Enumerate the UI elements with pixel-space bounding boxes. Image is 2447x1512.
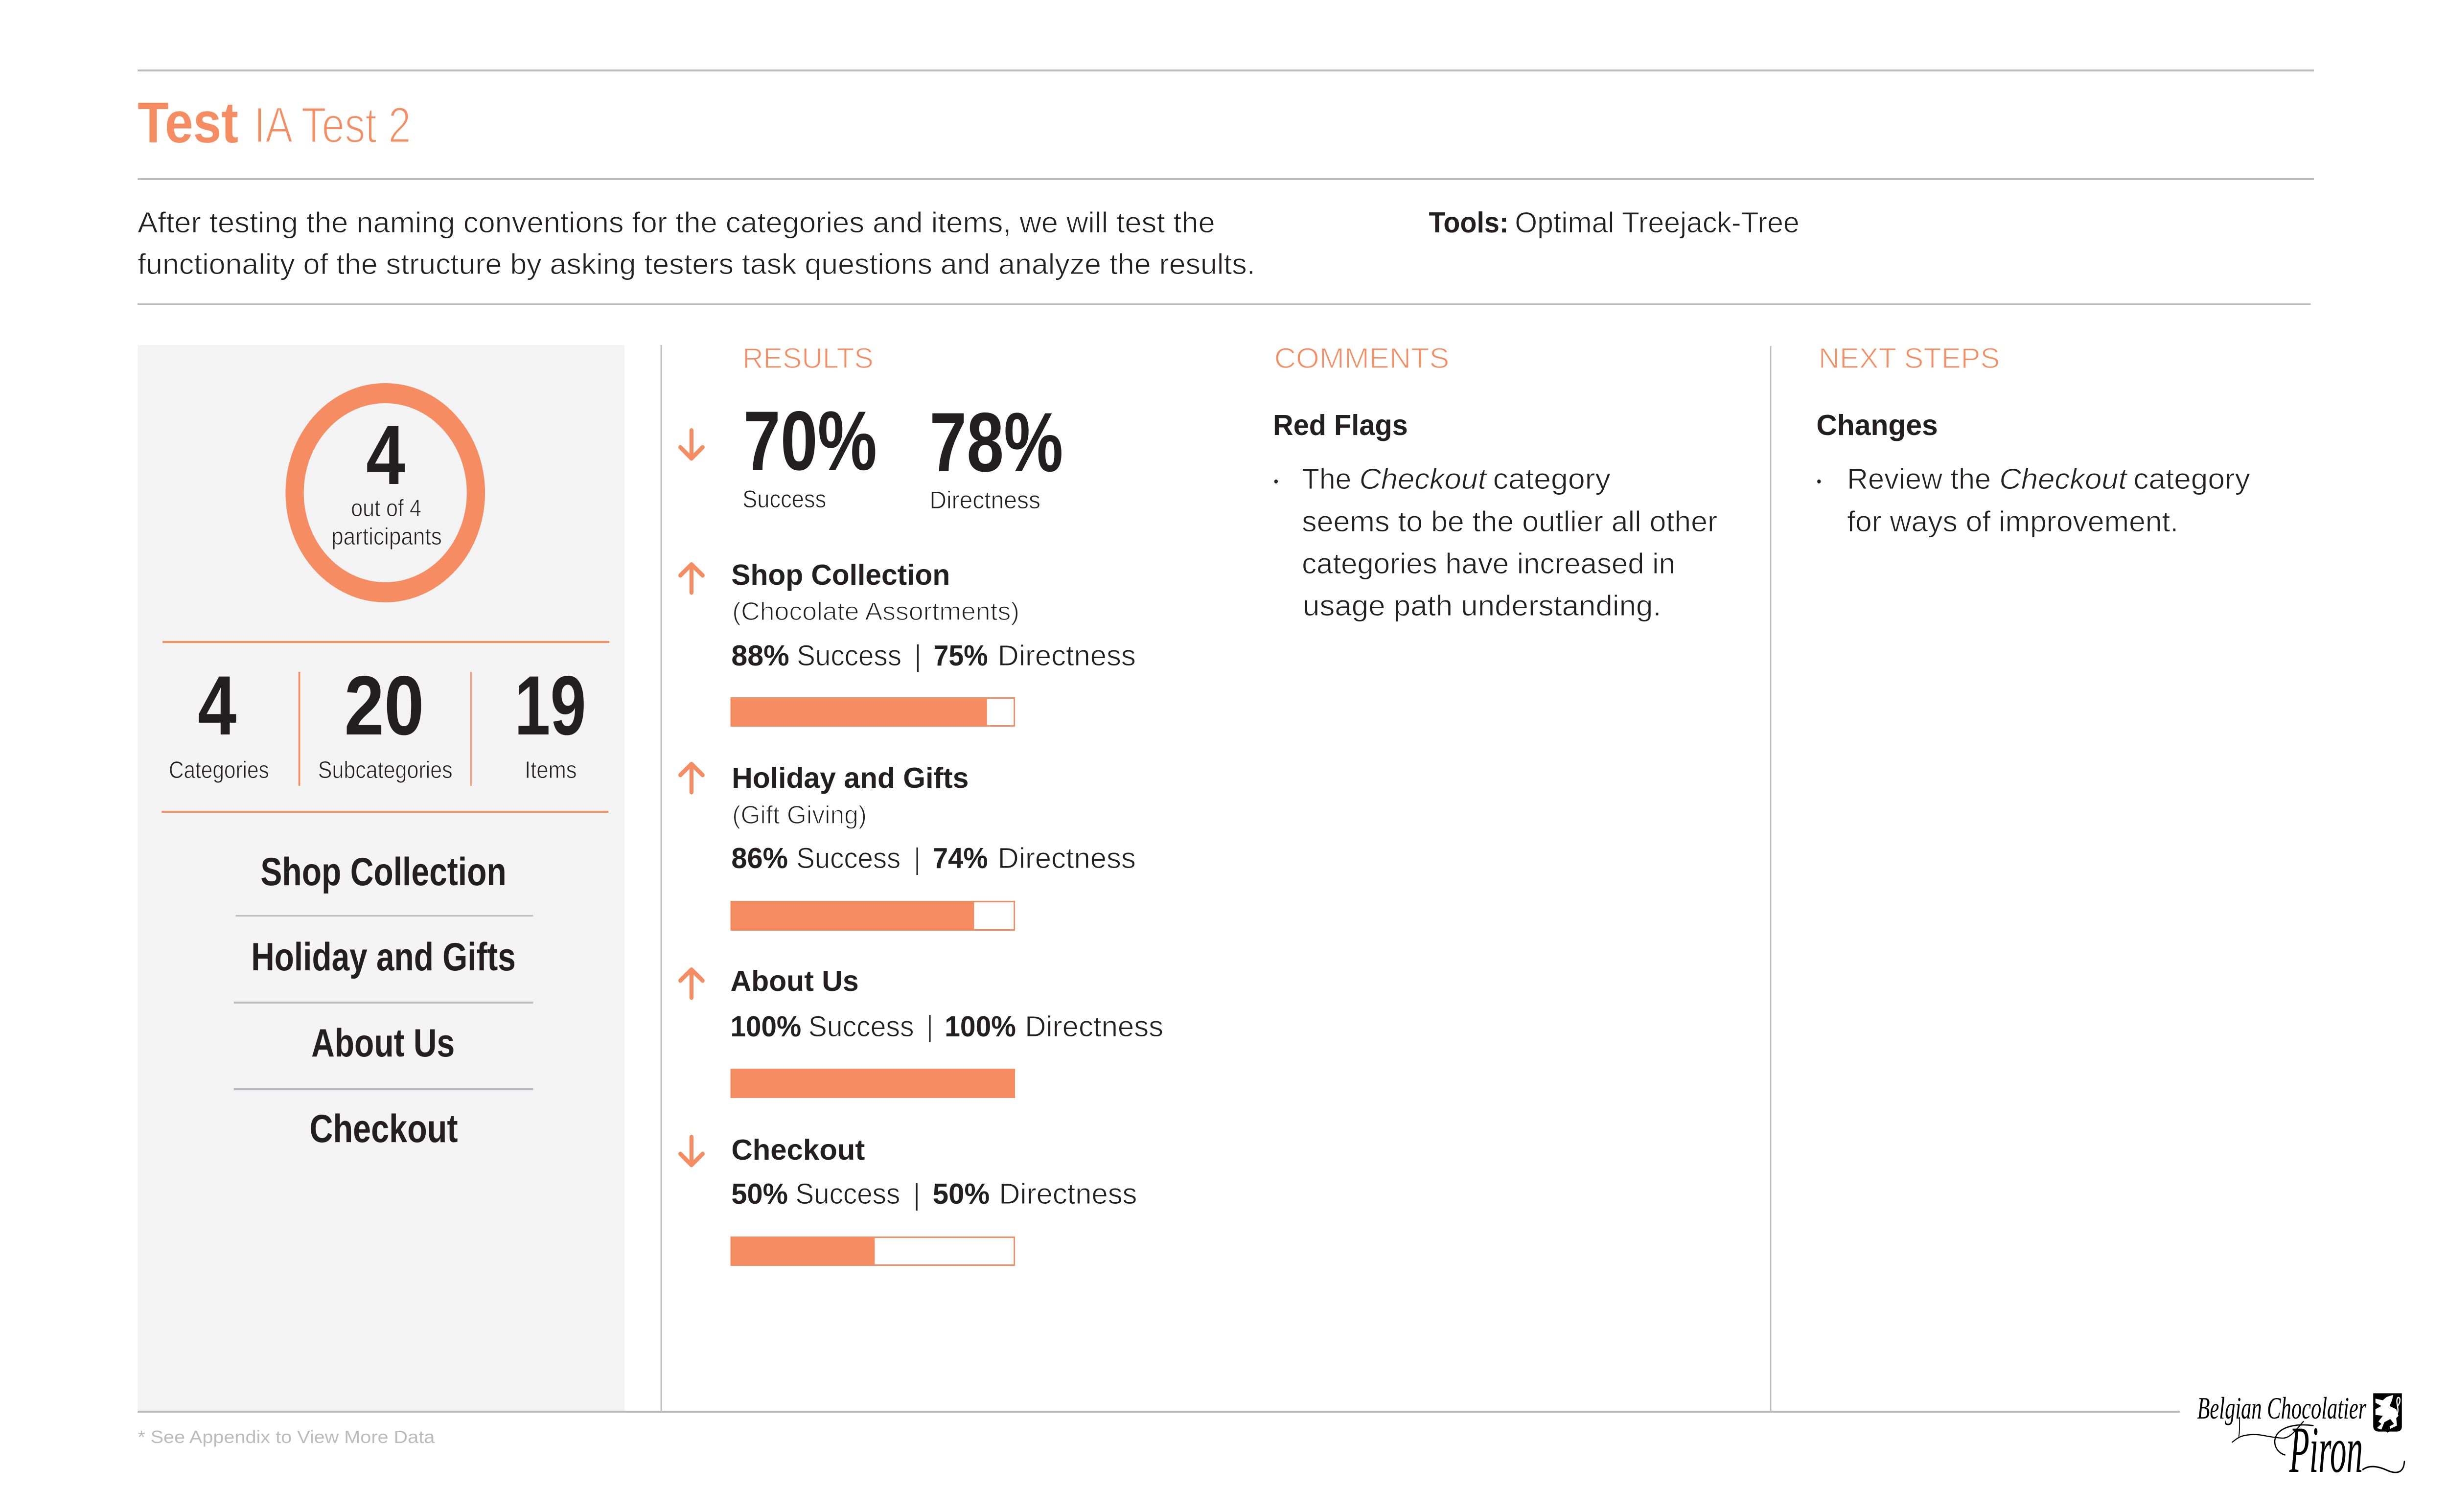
- bullet text: red flags: seems to be the outlier all other: [1302, 505, 1717, 538]
- bullet text: changes: for ways of improvement.: [1847, 505, 2178, 538]
- result: about us: Directness: [1025, 1010, 1163, 1043]
- stat: categories: [169, 658, 269, 783]
- bullet text: red flags: The: [1302, 463, 1351, 495]
- heading: next steps: NEXT STEPS: [1819, 343, 2000, 374]
- result: shop collection: Success: [797, 640, 901, 672]
- result: shop collection: Directness: [998, 640, 1136, 672]
- intro text: functionality of the structure by asking testers task questions and analyze the results.: [138, 248, 1255, 280]
- bullet text: red flags: usage path understanding.: [1303, 590, 1662, 622]
- intro text: [138, 206, 1255, 280]
- logo: Belgian Chocolatier Piron: Belgian Chocolatier: [2197, 1391, 2366, 1426]
- tools line: [1429, 206, 1800, 239]
- result: shop collection: Shop Collection: [731, 559, 950, 591]
- stat: categories: Categories: [169, 756, 269, 783]
- stat: items: [514, 658, 586, 783]
- intro text: After testing the naming conventions for the categories and items, we will test the: [138, 206, 1215, 239]
- category list: About Us: [311, 1021, 455, 1065]
- result: checkout: Success: [795, 1178, 900, 1210]
- category list: Shop Collection: [260, 850, 507, 894]
- result: checkout: 50%: [731, 1178, 788, 1210]
- panel: comments: [1273, 343, 1717, 622]
- heading: results: RESULTS: [742, 343, 874, 374]
- result: holiday and gifts: Holiday and Gifts: [732, 762, 969, 794]
- stat: overall success: 70%: [743, 393, 877, 488]
- title: IA Test 2: [254, 97, 411, 153]
- result: holiday and gifts: 86%: [731, 842, 788, 874]
- heading: comments: COMMENTS: [1274, 343, 1449, 374]
- panel: summary stats: [138, 345, 624, 1411]
- icon: checkout down arrow: [680, 1137, 703, 1165]
- result: about us: Success: [808, 1010, 914, 1043]
- stat: subcategories: [318, 658, 453, 783]
- category list: Checkout: [310, 1107, 458, 1151]
- subheading: red flags: Red Flags: [1273, 409, 1408, 441]
- result: checkout: 50%: [933, 1178, 990, 1210]
- participants ring: 4: [366, 408, 405, 502]
- stat: overall success: Success: [742, 486, 826, 513]
- result: about us: 100%: [945, 1010, 1016, 1043]
- bullet text: red flags: categories have increased in: [1302, 548, 1675, 580]
- result: checkout: Checkout: [731, 1134, 865, 1166]
- participants ring: participants: [331, 523, 442, 550]
- bullet text: changes: Checkout: [1999, 463, 2128, 495]
- icon: about us up arrow: [680, 970, 703, 998]
- result: holiday and gifts: 74%: [933, 842, 988, 874]
- result: checkout: Directness: [999, 1178, 1137, 1210]
- icon: heraldic lion shield: [2373, 1393, 2402, 1433]
- result: about us: About Us: [731, 965, 859, 997]
- result: holiday and gifts: [731, 762, 1136, 931]
- panel: next steps: [1816, 343, 2251, 538]
- bullet text: changes: category: [2133, 463, 2251, 495]
- result: about us: [731, 965, 1163, 1098]
- result: about us: 100%: [731, 1010, 801, 1043]
- icon: shop collection up arrow: [680, 565, 703, 593]
- stat: overall directness: 78%: [929, 395, 1063, 489]
- category list: [234, 850, 533, 1151]
- participants ring: out of 4: [351, 495, 421, 521]
- stat: subcategories: 20: [344, 658, 424, 753]
- stat: overall directness: Directness: [929, 487, 1040, 514]
- stat: items: Items: [525, 756, 577, 783]
- bullet text: changes: [1817, 463, 2251, 538]
- result: shop collection: 75%: [934, 640, 988, 672]
- footnote: * See Appendix to View More Data: [138, 1428, 435, 1447]
- category list: Holiday and Gifts: [251, 935, 516, 979]
- result: holiday and gifts: (Gift Giving): [732, 801, 867, 829]
- stat: subcategories: Subcategories: [318, 756, 453, 783]
- result: holiday and gifts: Success: [796, 842, 900, 874]
- subheading: changes: Changes: [1816, 409, 1938, 441]
- bullet text: red flags: Checkout: [1360, 463, 1487, 495]
- logo: Belgian Chocolatier Piron: Piron: [2289, 1413, 2363, 1486]
- stat: categories: 4: [198, 658, 236, 753]
- bullet text: changes: Review the: [1847, 463, 1991, 495]
- icon: overall down arrow: [680, 431, 703, 458]
- result: holiday and gifts: Directness: [998, 842, 1136, 874]
- title: [138, 90, 411, 155]
- tools line: Tools:: [1429, 206, 1508, 239]
- title: Test: [138, 90, 238, 155]
- result: shop collection: [731, 559, 1136, 727]
- stat: items: 19: [514, 658, 586, 753]
- icon: holiday up arrow: [680, 764, 703, 792]
- logo: Belgian Chocolatier Piron: [2197, 1391, 2404, 1486]
- tools line: Optimal Treejack-Tree: [1515, 206, 1800, 239]
- result: shop collection: 88%: [731, 640, 789, 672]
- result: checkout: [731, 1134, 1137, 1266]
- participants ring: [295, 393, 476, 592]
- result: shop collection: (Chocolate Assortments): [732, 597, 1019, 626]
- panel: results: [680, 343, 1163, 1266]
- bullet text: red flags: category: [1493, 463, 1611, 495]
- bullet text: red flags: [1274, 463, 1717, 622]
